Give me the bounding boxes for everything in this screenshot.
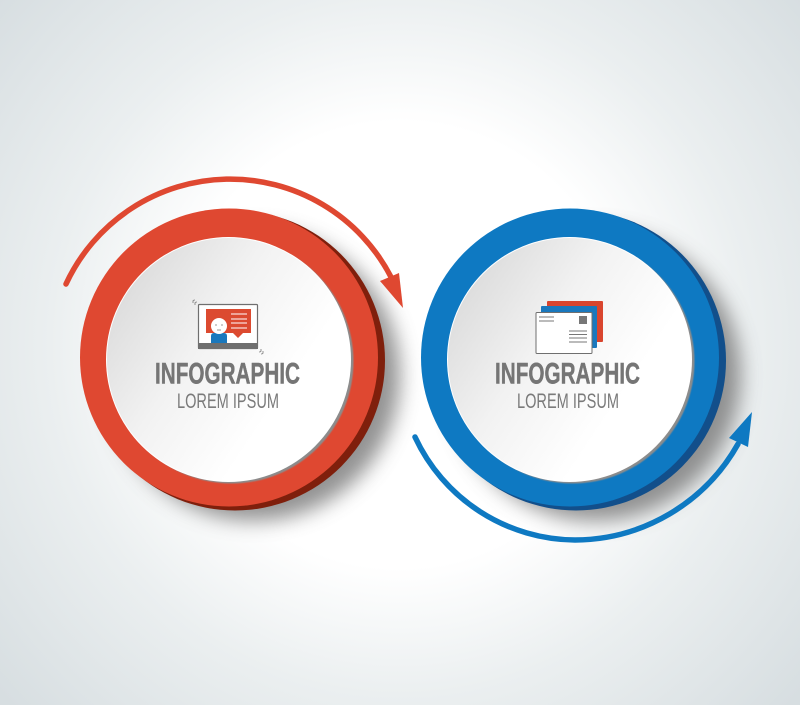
heading: infographic: INFOGRAPHIC	[495, 358, 640, 390]
heading: infographic: INFOGRAPHIC	[155, 358, 300, 390]
panel: blue circle	[421, 208, 741, 521]
arrow: blue counter-clockwise	[415, 412, 752, 540]
panel: red circle	[80, 208, 400, 521]
subheading: lorem ipsum: LOREM IPSUM	[177, 389, 279, 413]
icon: postcards	[536, 301, 603, 354]
subheading: lorem ipsum: LOREM IPSUM	[517, 389, 619, 413]
arrow: red clockwise	[66, 179, 403, 308]
icon: laptop with speaker	[193, 300, 263, 354]
